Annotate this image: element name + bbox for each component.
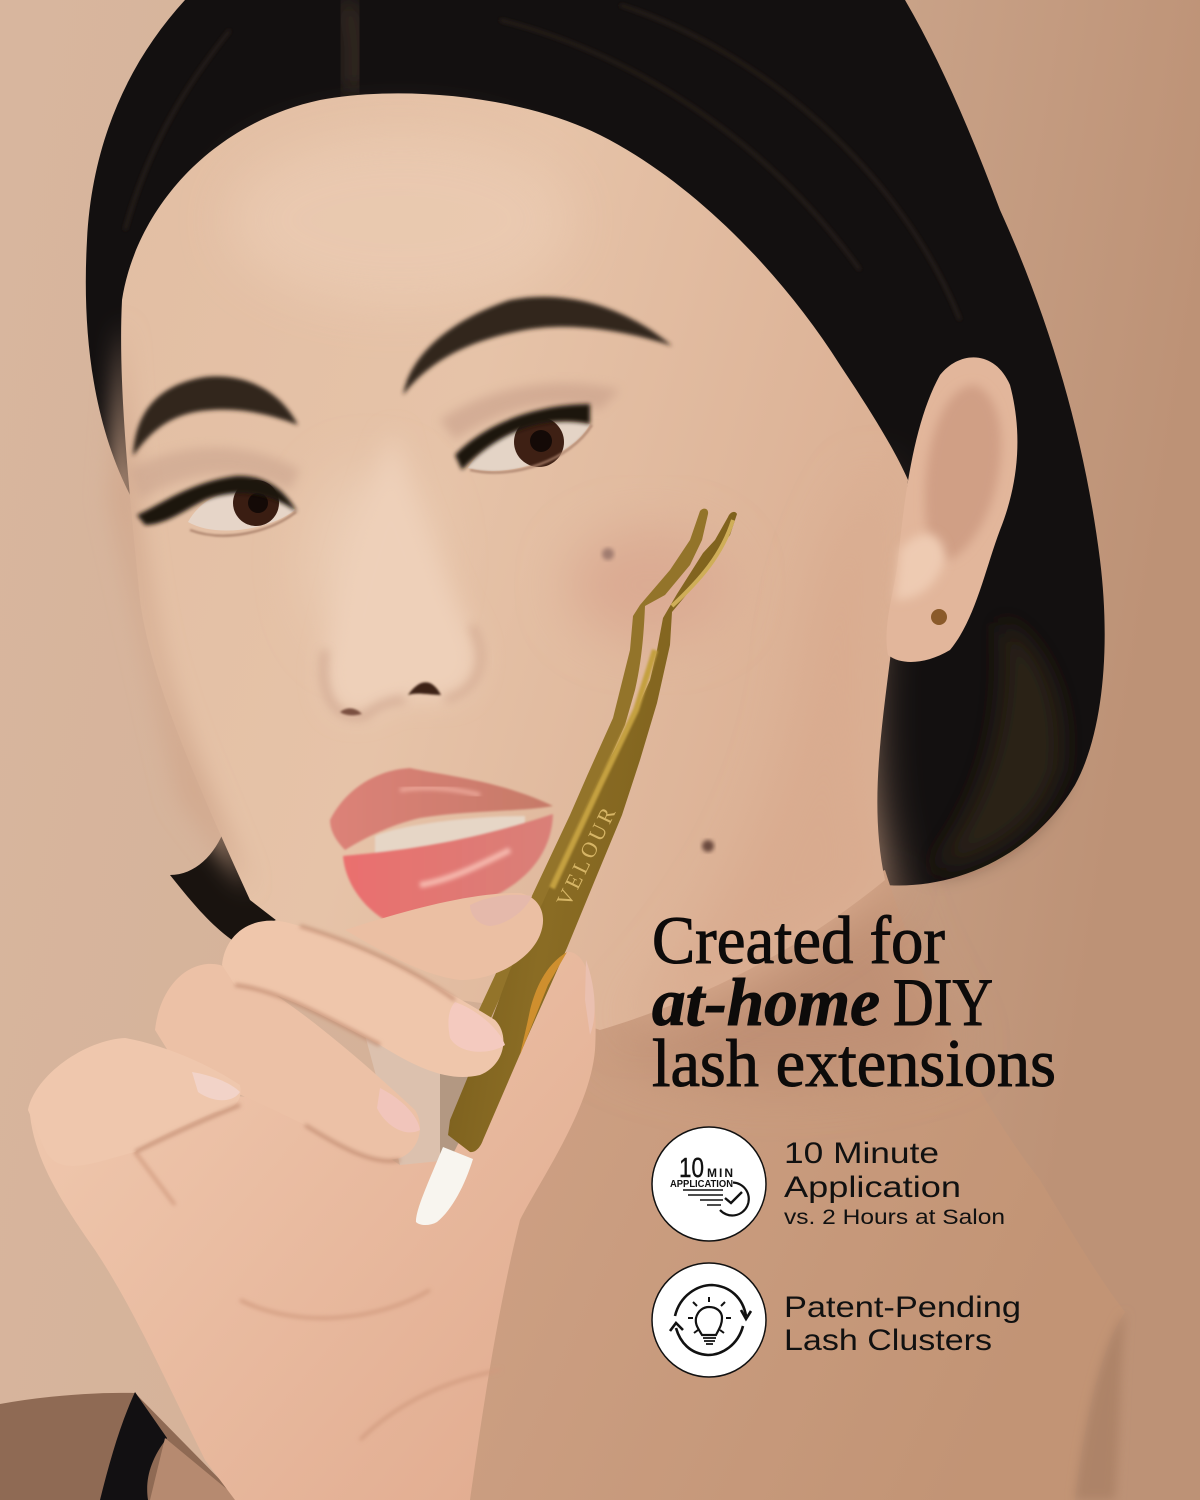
tweezers front arm [448, 512, 737, 1152]
left shoulder and strap [0, 1392, 240, 1500]
eyebrow: left [133, 376, 298, 456]
tweezers white tip [416, 1147, 473, 1225]
ring finger [155, 964, 420, 1160]
icon: 10 minute application: 10 [679, 1152, 704, 1183]
tweezers back arm [478, 509, 708, 1020]
label: patent-pending lash clusters [784, 1291, 1021, 1357]
forehead highlight [230, 135, 570, 305]
label: 10 minute application: vs. 2 Hours at Salon [784, 1206, 1005, 1229]
icon: patent pending light bulb [652, 1263, 766, 1377]
hair [86, 0, 1105, 942]
earring stud [931, 609, 947, 625]
eyebrow: right [403, 297, 672, 395]
label: 10 minute application: 10 Minute [784, 1137, 939, 1170]
headline: Created for [652, 902, 945, 978]
label: patent-pending lash clusters: Lash Clusters [784, 1324, 992, 1357]
tweezers orange reflection [520, 952, 567, 1055]
middle finger [222, 921, 503, 1077]
cheek blush [570, 530, 730, 640]
beauty marks [602, 548, 614, 560]
palm and thumb [30, 952, 596, 1500]
headline [652, 902, 1056, 1101]
finger shadows [135, 926, 455, 1161]
face [110, 93, 908, 1030]
fingers [28, 893, 543, 1166]
headline: lash extensions [652, 1025, 1056, 1101]
tweezers brand: VELOUR [551, 800, 622, 910]
tweezers highlight [552, 650, 655, 888]
headline: DIY [893, 964, 993, 1040]
nose [323, 430, 481, 717]
neck shadow behind fingers [440, 1040, 505, 1155]
eyelid crease shading [130, 448, 300, 500]
tweezers [448, 509, 737, 1152]
lips [330, 768, 553, 921]
middle nail [448, 1002, 505, 1052]
ring nail [377, 1088, 420, 1132]
eye: right [455, 404, 592, 473]
index finger [345, 893, 543, 980]
neck and chest [440, 870, 1125, 1500]
icon: 10 minute application: MIN [707, 1166, 733, 1180]
jaw shading [620, 470, 885, 1030]
label: patent-pending lash clusters: Patent-Pending [784, 1291, 1021, 1324]
ear [886, 357, 1017, 662]
palm creases [135, 1152, 500, 1440]
icon: 10 minute application [652, 1127, 766, 1241]
gap between fingers and hand [365, 1035, 440, 1165]
headline: at-home [652, 964, 880, 1040]
icon: 10 minute application: APPLICATION [670, 1179, 733, 1190]
label: 10 minute application: Application [784, 1171, 961, 1204]
pinky finger [28, 1038, 241, 1166]
label: 10 minute application [784, 1137, 1005, 1229]
pinky nail [192, 1072, 240, 1100]
index nail [470, 895, 532, 926]
eye: left [137, 476, 297, 536]
